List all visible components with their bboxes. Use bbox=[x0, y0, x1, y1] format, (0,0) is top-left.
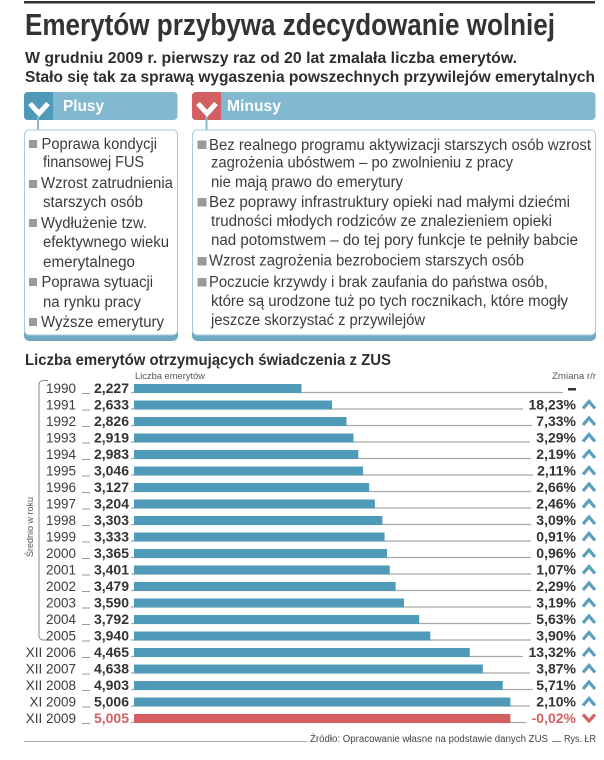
row 1992 bbox=[46, 413, 595, 429]
row 2000 bbox=[46, 545, 595, 561]
row XII 2006: 4,465 bbox=[94, 644, 129, 660]
plusy list: na rynku pracy bbox=[43, 294, 141, 311]
row XII 2009 bbox=[26, 710, 595, 726]
row 2003: 3,590 bbox=[94, 594, 129, 610]
plusy list: emerytalnego bbox=[43, 254, 135, 271]
row 1996: 3,127 bbox=[94, 479, 129, 495]
minusy list: nie mają prawo do emerytury bbox=[211, 174, 403, 191]
row 1996 bbox=[46, 479, 595, 495]
row XII 2008: 4,903 bbox=[94, 677, 129, 693]
row 1994: 2,983 bbox=[94, 446, 129, 462]
row 2005: 3,940 bbox=[94, 628, 129, 644]
row 1992: 7,33% bbox=[536, 413, 577, 429]
row 2002: 2,29% bbox=[536, 578, 577, 594]
bracket: yearly average: Średnio w roku bbox=[24, 497, 36, 557]
row 2000: 3,365 bbox=[94, 545, 129, 561]
row 1994: 1994 bbox=[46, 447, 76, 462]
row 1994 bbox=[46, 446, 595, 462]
row XII 2008 bbox=[26, 677, 595, 693]
chart heading: Liczba emerytów otrzymujących świadczenia z ZUS bbox=[25, 352, 391, 369]
minusy list: Bez realnego programu aktywizacji starszych osób wzrost bbox=[209, 137, 592, 154]
minusy list: Wzrost zagrożenia bezrobociem starszych osób bbox=[209, 252, 524, 270]
row 1999: 1999 bbox=[46, 530, 76, 544]
column label: number of pensioners: Liczba emerytów bbox=[135, 371, 205, 382]
row 2003 bbox=[46, 594, 595, 610]
row 2004 bbox=[46, 611, 595, 627]
row XII 2006: XII 2006 bbox=[26, 645, 76, 660]
row 1991: 18,23% bbox=[529, 396, 577, 412]
row 2005: 3,90% bbox=[536, 628, 577, 644]
plusy header bar bbox=[24, 92, 178, 120]
row 1995: 1995 bbox=[46, 464, 76, 478]
row 1997 bbox=[46, 496, 595, 512]
minusy header bar bbox=[192, 92, 596, 120]
row 2004: 5,63% bbox=[536, 611, 577, 627]
row XI 2009: 5,006 bbox=[94, 694, 129, 710]
minusy box bbox=[192, 130, 596, 341]
row 2002: 3,479 bbox=[94, 578, 129, 594]
row XII 2008: 5,71% bbox=[536, 677, 577, 693]
minusy list: nad potomstwem – do tej pory funkcje te pełniły babcie bbox=[211, 232, 578, 249]
row 1997: 3,204 bbox=[94, 496, 129, 512]
row 1991: 2,633 bbox=[94, 396, 129, 412]
subtitle bbox=[25, 50, 595, 86]
minusy list bbox=[198, 137, 592, 329]
row 2004: 3,792 bbox=[94, 611, 129, 627]
row 1996: 1996 bbox=[46, 480, 76, 495]
row 1993 bbox=[46, 430, 595, 446]
row 2002: 2002 bbox=[46, 579, 76, 594]
minusy list: Poczucie krzywdy i brak zaufania do państwa osób, bbox=[209, 274, 548, 291]
footer: source: Rys. ŁR bbox=[564, 734, 596, 745]
row 1998 bbox=[46, 512, 595, 528]
row 1999: 3,333 bbox=[94, 528, 129, 544]
row 2003: 3,19% bbox=[536, 594, 577, 610]
row XII 2009: 5,005 bbox=[94, 710, 129, 726]
row 1999: 0,91% bbox=[536, 528, 577, 544]
row XII 2006 bbox=[26, 644, 595, 660]
row XII 2007: 4,638 bbox=[94, 660, 129, 676]
row 1998: 3,303 bbox=[94, 512, 129, 528]
minusy list: które są urodzone tuż po tych rocznikach, które mogły bbox=[211, 293, 568, 310]
row 2003: 2003 bbox=[46, 596, 76, 610]
icon: plusy chevron bbox=[24, 92, 53, 130]
row 2005 bbox=[46, 628, 595, 644]
subtitle: W grudniu 2009 r. pierwszy raz od 20 lat zmalała liczba emerytów. bbox=[25, 50, 517, 67]
minusy list: zagrożenia ubóstwem – po zwolnieniu z pracy bbox=[211, 154, 513, 172]
row 1993: 3,29% bbox=[536, 430, 577, 446]
row 2001: 2001 bbox=[46, 562, 76, 578]
column label: change: Zmiana r/r bbox=[552, 371, 596, 382]
row XII 2008: XII 2008 bbox=[26, 678, 76, 693]
row 1995 bbox=[46, 462, 595, 478]
row 1990: 1990 bbox=[46, 381, 76, 396]
minusy list: jeszcze skorzystać z przywilejów bbox=[210, 312, 426, 329]
row 1996: 2,66% bbox=[536, 479, 577, 495]
bar chart bbox=[24, 371, 596, 726]
row 1993: 1993 bbox=[46, 430, 76, 446]
row 1993: 2,919 bbox=[94, 430, 129, 446]
row 1991 bbox=[46, 396, 595, 412]
row 1990: 2,227 bbox=[94, 380, 129, 396]
minusy list: Bez poprawy infrastruktury opieki nad małymi dziećmi bbox=[209, 194, 570, 211]
row 1992: 2,826 bbox=[94, 413, 129, 429]
row 2005: 2005 bbox=[46, 628, 76, 644]
row 2002 bbox=[46, 578, 595, 594]
row 2004: 2004 bbox=[46, 612, 76, 627]
row XII 2009: -0,02% bbox=[532, 710, 577, 726]
row XI 2009: 2,10% bbox=[536, 694, 577, 710]
row 1992: 1992 bbox=[46, 414, 76, 429]
footer: source: Źródło: Opracowanie własne na podstawie danych ZUS bbox=[310, 732, 548, 745]
plusy list: Wzrost zatrudnienia bbox=[41, 175, 173, 192]
row XI 2009: XI 2009 bbox=[29, 694, 76, 710]
row XII 2007 bbox=[26, 660, 595, 676]
footer: source bbox=[24, 732, 596, 745]
plusy list: finansowej FUS bbox=[43, 154, 144, 171]
icon: minusy chevron bbox=[192, 92, 221, 130]
row 1995: 3,046 bbox=[94, 462, 129, 478]
row XII 2007: XII 2007 bbox=[26, 662, 76, 676]
minusy list: trudności młodych rodziców ze znalezieniem opieki bbox=[211, 213, 552, 230]
bracket: yearly average bbox=[24, 380, 48, 640]
minusy heading: Minusy bbox=[227, 98, 281, 115]
plusy list: Poprawa kondycji bbox=[42, 136, 157, 153]
plusy list: efektywnego wieku bbox=[43, 234, 169, 251]
panel: minusy bbox=[192, 92, 596, 341]
plusy list: Poprawa sytuacji bbox=[42, 274, 153, 291]
row 1997: 1997 bbox=[46, 496, 76, 512]
row 1995: 2,11% bbox=[537, 462, 577, 478]
row 2000: 0,96% bbox=[536, 545, 577, 561]
plusy list: Wydłużenie tzw. bbox=[41, 215, 147, 232]
row XI 2009 bbox=[29, 694, 595, 710]
subtitle: Stało się tak za sprawą wygaszenia powszechnych przywilejów emerytalnych bbox=[25, 69, 595, 86]
row 2001: 1,07% bbox=[536, 562, 577, 578]
row 1991: 1991 bbox=[46, 398, 76, 412]
row 1997: 2,46% bbox=[536, 496, 577, 512]
panel: plusy bbox=[24, 92, 178, 341]
row 1999 bbox=[46, 528, 595, 544]
plusy heading: Plusy bbox=[63, 98, 104, 115]
row XII 2009: XII 2009 bbox=[26, 711, 76, 726]
row XII 2006: 13,32% bbox=[529, 644, 577, 660]
plusy box bbox=[24, 130, 178, 341]
row 1998: 3,09% bbox=[536, 512, 577, 528]
plusy list: Wyższe emerytury bbox=[41, 314, 164, 331]
row 2001: 3,401 bbox=[94, 562, 129, 578]
row 2000: 2000 bbox=[46, 546, 76, 561]
plusy list: starszych osób bbox=[43, 194, 143, 211]
row 1998: 1998 bbox=[46, 513, 76, 528]
row 2001 bbox=[46, 562, 595, 578]
row XII 2007: 3,87% bbox=[536, 660, 577, 676]
plusy list bbox=[29, 136, 173, 331]
row 1990 bbox=[46, 380, 576, 396]
row 1994: 2,19% bbox=[536, 446, 577, 462]
